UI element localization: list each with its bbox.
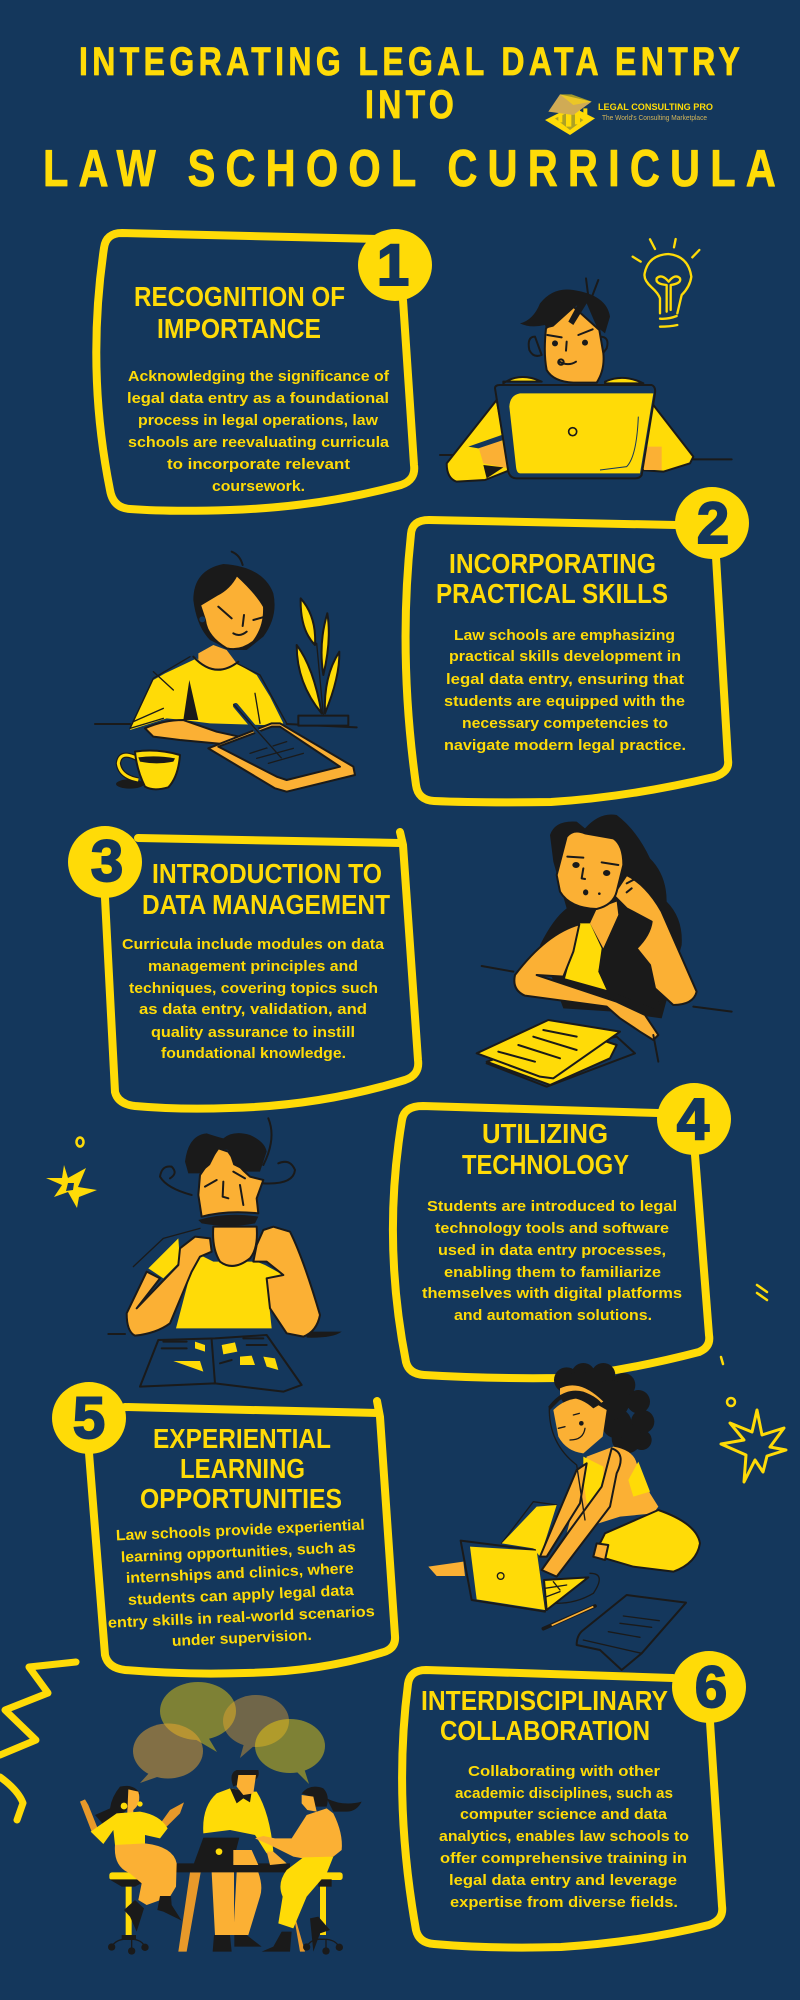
body text [439, 1763, 689, 1911]
body text: practical skills development in [449, 648, 681, 665]
body text: schools are reevaluating curricula [128, 434, 390, 451]
body text: internships and clinics, where [126, 1560, 354, 1587]
body text: navigate modern legal practice. [444, 737, 686, 754]
heading: INCORPORATING [449, 548, 656, 579]
panel: step 1 recognition of importance [96, 229, 432, 511]
badge 6: 6 [695, 1655, 727, 1720]
plant [297, 598, 348, 726]
body text: Curricula include modules on data [122, 936, 385, 953]
middle person standing [203, 1770, 287, 1952]
body text: themselves with digital platforms [422, 1285, 682, 1302]
body text: analytics, enables law schools to [439, 1828, 689, 1845]
illustration: team talking at table [80, 1682, 362, 1955]
body text: legal data entry, ensuring that [446, 671, 684, 688]
body text: management principles and [148, 958, 358, 975]
panel: step 4 utilizing technology [393, 1083, 731, 1378]
heading: INTRODUCTION TO [152, 858, 382, 889]
illustration: man with laptop and light bulb [440, 239, 732, 482]
body text [422, 1198, 682, 1324]
table and laptop [165, 1838, 305, 1952]
heading: TECHNOLOGY [462, 1149, 629, 1180]
body text: to incorporate relevant [167, 456, 350, 473]
heading: IMPORTANCE [157, 313, 321, 344]
open book [140, 1335, 302, 1392]
body text: foundational knowledge. [161, 1045, 346, 1062]
heading [142, 858, 390, 920]
panel: step 2 incorporating practical skills [406, 487, 749, 802]
icon: light bulb [633, 239, 699, 327]
body text: academic disciplines, such as [455, 1785, 673, 1802]
heading: OPPORTUNITIES [140, 1483, 342, 1514]
logo: Legal Consulting Pro: LEGAL CONSULTING PRO [598, 102, 713, 113]
figure [428, 1363, 700, 1603]
title: INTO [365, 82, 454, 127]
figure [514, 814, 697, 1062]
logo: Legal Consulting Pro: The World's Consulting Marketplace [602, 113, 707, 122]
speech bubbles [133, 1682, 325, 1784]
body text: under supervision. [171, 1627, 312, 1650]
body text: legal data entry as a foundational [127, 390, 389, 407]
title: LAW SCHOOL CURRICULA [43, 139, 776, 197]
body text: coursework. [212, 478, 305, 495]
body text: process in legal operations, law [138, 412, 378, 429]
body text [127, 368, 390, 495]
logo: Legal Consulting Pro [545, 94, 713, 135]
body text: expertise from diverse fields. [450, 1894, 678, 1911]
heading: COLLABORATION [440, 1715, 650, 1746]
notebook [577, 1595, 686, 1670]
badge 5 [52, 1382, 126, 1454]
panel: step 3 introduction to data management [68, 826, 418, 1109]
heading: DATA MANAGEMENT [142, 889, 390, 920]
pencil [543, 1606, 595, 1629]
body text: techniques, covering topics such [129, 980, 378, 997]
illustration: woman on the phone [477, 814, 732, 1087]
heading: INTERDISCIPLINARY [421, 1685, 668, 1716]
heading [436, 548, 668, 609]
body text: used in data entry processes, [438, 1242, 666, 1259]
body text: Law schools provide experiential [116, 1517, 365, 1544]
badge 2 [675, 487, 749, 559]
heading [134, 281, 345, 344]
heading [462, 1118, 629, 1180]
body text: Acknowledging the significance of [128, 368, 390, 385]
body text: Law schools are emphasizing [454, 627, 675, 644]
body text: students can apply legal data [128, 1582, 355, 1609]
badge 4 [657, 1083, 731, 1155]
body text: legal data entry and leverage [449, 1872, 677, 1889]
body text: computer science and data [460, 1806, 668, 1823]
body text: enabling them to familiarize [444, 1264, 661, 1281]
title: INTEGRATING LEGAL DATA ENTRY [79, 39, 740, 84]
man figure [447, 278, 693, 482]
heading: PRACTICAL SKILLS [436, 578, 668, 609]
title [43, 39, 776, 197]
body text [444, 627, 686, 754]
body text: and automation solutions. [454, 1307, 652, 1324]
illustration: girl sitting with laptop [428, 1363, 700, 1670]
badge 4: 4 [677, 1087, 709, 1152]
heading: EXPERIENTIAL [153, 1423, 331, 1454]
body text: necessary competencies to [462, 715, 668, 732]
heading [421, 1685, 668, 1746]
right person on stool [255, 1787, 362, 1955]
badge 6 [672, 1651, 746, 1723]
badge 1: 1 [377, 233, 409, 298]
badge 3: 3 [91, 829, 123, 894]
badge 2: 2 [697, 491, 729, 556]
body text: learning opportunities, such as [121, 1539, 356, 1566]
badge 3 [68, 826, 142, 898]
panel: step 5 experiential learning opportunities [52, 1382, 395, 1674]
heading [140, 1423, 342, 1514]
coffee cup [116, 751, 180, 789]
tablet [208, 704, 355, 792]
body text: offer comprehensive training in [440, 1850, 687, 1867]
body text: technology tools and software [435, 1220, 669, 1237]
body text: students are equipped with the [444, 693, 685, 710]
panel: step 6 interdisciplinary collaboration [402, 1651, 746, 1948]
body text [108, 1517, 375, 1650]
heading: RECOGNITION OF [134, 281, 345, 312]
figure [127, 1118, 320, 1337]
papers [477, 1020, 635, 1087]
body text: quality assurance to instill [151, 1024, 355, 1041]
decorative scribble left [0, 1662, 76, 1820]
illustration: woman writing on tablet [95, 552, 357, 792]
laptop [461, 1541, 588, 1612]
laptop [495, 385, 655, 478]
badge 1 [358, 229, 432, 301]
heading: UTILIZING [482, 1118, 608, 1149]
illustration: man drinking from mug [108, 1118, 342, 1392]
body text [122, 936, 385, 1062]
left person on stool [80, 1786, 184, 1955]
icon: star left [46, 1138, 97, 1208]
body text: entry skills in real-world scenarios [108, 1603, 375, 1632]
badge 5: 5 [73, 1386, 105, 1451]
heading: LEARNING [180, 1453, 305, 1484]
figure [130, 552, 287, 753]
body text: as data entry, validation, and [139, 1001, 367, 1018]
body text: Collaborating with other [468, 1763, 660, 1780]
body text: Students are introduced to legal [427, 1198, 677, 1215]
icon: scribble and star right [721, 1285, 786, 1482]
